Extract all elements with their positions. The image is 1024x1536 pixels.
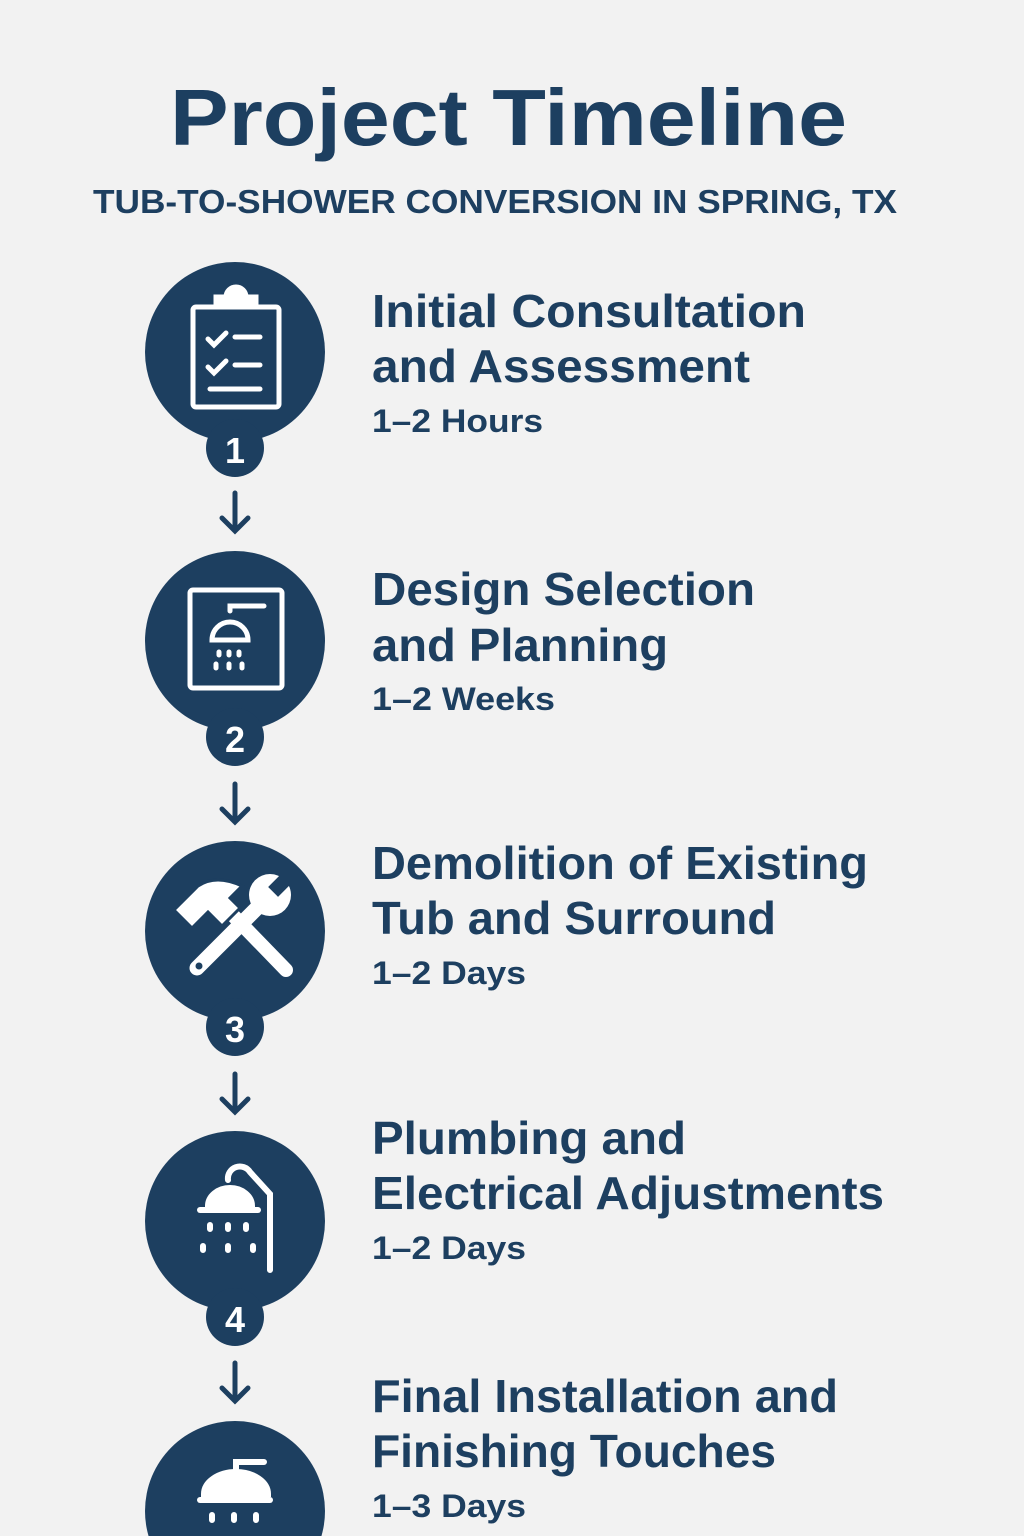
step 2 marker: 2 [225,719,245,760]
step 4 text: Electrical Adjustments [372,1167,884,1219]
step 4 text [372,1112,884,1266]
icon: shower head with pipe [200,1166,270,1270]
step 4 marker: 4 [225,1299,245,1340]
step 3 marker: 3 [225,1009,245,1050]
step 3 marker [145,841,325,1056]
step 5 text [372,1370,838,1524]
step 3 text: 1–2 Days [372,955,526,991]
arrow 1 [222,493,248,531]
icon: framed shower [190,590,282,688]
arrow 4 [222,1363,248,1401]
step 1 text: Initial Consultation [372,285,806,337]
step 5 text: Finishing Touches [372,1425,776,1477]
step 2 text: Design Selection [372,563,755,615]
step 1 text: 1–2 Hours [372,403,543,439]
step 1 marker [145,262,325,477]
arrow 2 [222,784,248,822]
step 1 marker: 1 [225,430,245,471]
title: Project Timeline [170,73,847,162]
step 2 marker [145,551,325,766]
step 4 marker [145,1131,325,1346]
step 2 text: and Planning [372,619,668,671]
step 1 text [372,285,806,439]
step 2 text [372,563,755,717]
icon: shower head [200,1462,270,1520]
step 2 text: 1–2 Weeks [372,681,555,717]
step 5 text: 1–3 Days [372,1488,526,1524]
step 1 text: and Assessment [372,340,750,392]
step 4 text: Plumbing and [372,1112,686,1164]
icon: hammer and wrench [174,867,298,970]
step 3 text: Tub and Surround [372,892,776,944]
step 3 text: Demolition of Existing [372,837,868,889]
step 4 text: 1–2 Days [372,1230,526,1266]
icon: clipboard [193,287,279,407]
arrow 3 [222,1074,248,1112]
step 5 text: Final Installation and [372,1370,838,1422]
step 5 marker [145,1421,325,1536]
subtitle: TUB-TO-SHOWER CONVERSION IN SPRING, TX [93,183,897,220]
step 3 text [372,837,868,991]
